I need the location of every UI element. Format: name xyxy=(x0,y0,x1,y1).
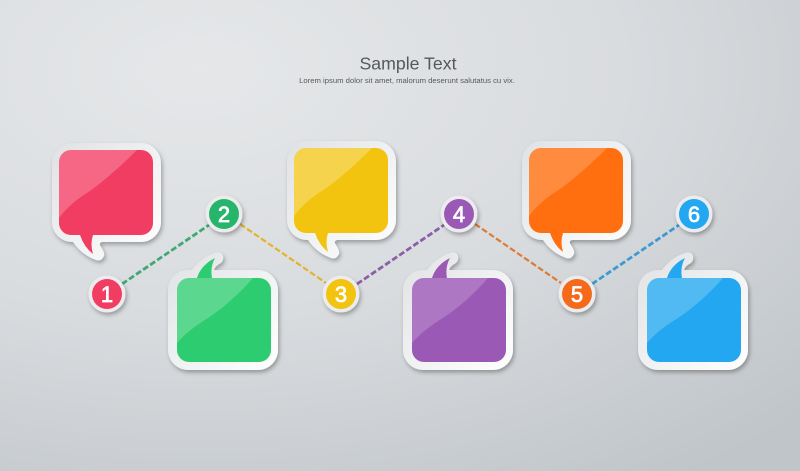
number badge 1: 1 xyxy=(101,282,113,307)
number badge 4 xyxy=(440,196,478,232)
speech bubble: green xyxy=(168,252,278,370)
speech bubble: red xyxy=(52,143,161,260)
speech bubble: blue xyxy=(638,252,748,370)
number badge 6 xyxy=(676,196,712,232)
number badge 5: 5 xyxy=(571,282,583,307)
dashed connector: 5 to 6 xyxy=(592,225,679,284)
subtitle: Lorem ipsum dolor sit amet, malorum deserunt salutatus cu vix. xyxy=(299,76,515,85)
speech bubble: orange xyxy=(522,141,631,258)
dashed connector: 2 to 3 xyxy=(240,224,326,283)
number badge 3: 3 xyxy=(335,282,347,307)
number badge 3 xyxy=(322,276,360,312)
dashed connector: 4 to 5 xyxy=(475,224,561,283)
number badge 2 xyxy=(206,196,242,232)
speech bubble: yellow xyxy=(287,141,396,258)
number badge 4: 4 xyxy=(453,202,465,227)
dashed connector: 1 to 2 xyxy=(122,225,209,284)
number badge 2: 2 xyxy=(218,202,230,227)
number badge 5 xyxy=(558,276,596,312)
number badge 1 xyxy=(88,276,126,312)
dashed connector: 3 to 4 xyxy=(357,225,444,284)
number badge 6: 6 xyxy=(688,202,700,227)
title: Sample Text xyxy=(359,54,457,74)
speech bubble: purple xyxy=(403,252,513,370)
